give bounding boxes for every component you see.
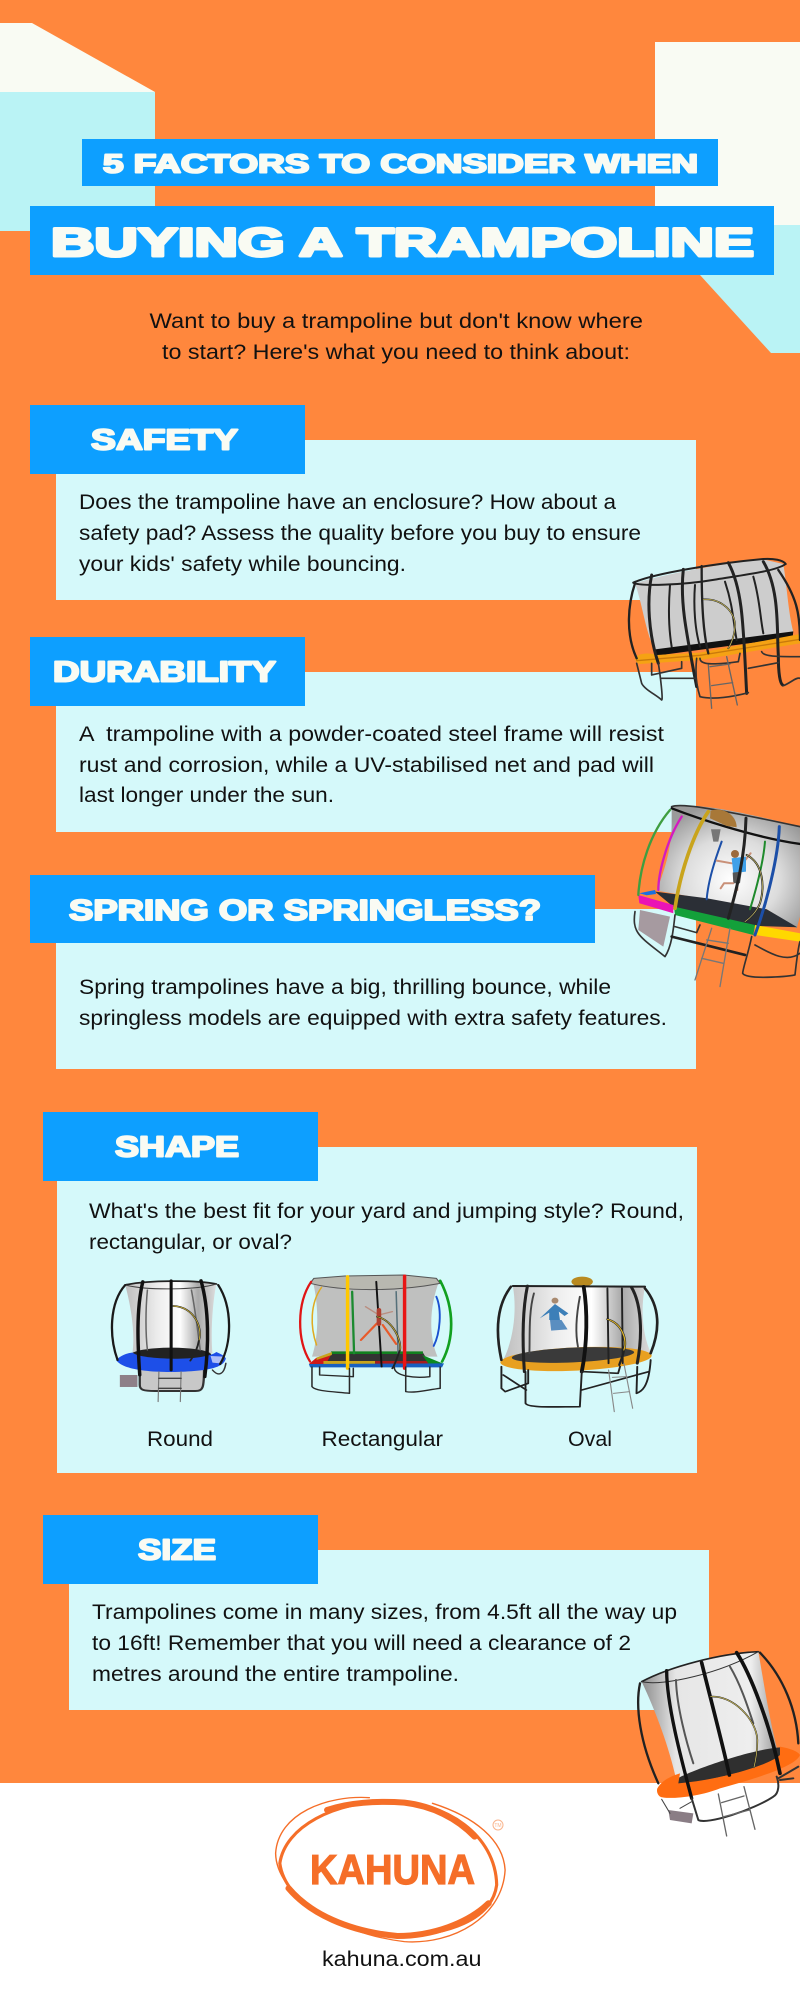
main title banner xyxy=(30,206,774,275)
panel: durability xyxy=(30,637,696,832)
heading: size: SIZE xyxy=(138,1534,216,1566)
subtitle banner: 5 FACTORS TO CONSIDER WHEN xyxy=(103,150,698,178)
text: size: Trampolines come in many sizes, from 4.5ft all the way up xyxy=(92,1601,677,1624)
labels: shape names: Oval xyxy=(568,1428,612,1451)
heading: safety xyxy=(30,405,305,474)
icon: orange round trampoline near size xyxy=(638,1652,800,1836)
heading: spring or springless: SPRING OR SPRINGLESS? xyxy=(69,895,541,927)
text: durability: rust and corrosion, while a UV-stabilised net and pad will xyxy=(79,754,654,777)
text: size: to 16ft! Remember that you will need a clearance of 2 xyxy=(92,1632,631,1655)
text: shape: What's the best fit for your yard and jumping style? Round, xyxy=(89,1200,684,1223)
text: safety: Does the trampoline have an enclosure? How about a xyxy=(79,491,616,514)
icon: rectangular trampoline xyxy=(300,1275,451,1393)
text: safety xyxy=(79,491,641,576)
text: safety: your kids' safety while bouncing. xyxy=(79,553,406,576)
icon: oval trampoline near safety xyxy=(629,559,800,708)
logo: kahuna: KAHUNA xyxy=(310,1846,475,1893)
labels: shape names: Round xyxy=(147,1428,213,1451)
main title banner: BUYING A TRAMPOLINE xyxy=(51,221,754,265)
heading: safety: SAFETY xyxy=(91,424,238,456)
subtitle banner xyxy=(82,139,718,186)
heading: shape: SHAPE xyxy=(115,1132,239,1164)
heading: shape xyxy=(43,1112,318,1181)
text: spring or springless: Spring trampolines have a big, thrilling bounce, while xyxy=(79,976,611,999)
panel: shape xyxy=(43,1112,697,1473)
icon: trademark xyxy=(493,1820,503,1830)
text: shape: rectangular, or oval? xyxy=(89,1231,292,1254)
heading: durability: DURABILITY xyxy=(53,656,276,688)
text: size xyxy=(92,1601,677,1686)
text: durability: A trampoline with a powder-coated steel frame will resist xyxy=(79,723,664,746)
heading: spring or springless xyxy=(30,875,595,943)
icon: rainbow trampoline near spring section xyxy=(634,806,800,987)
panel: safety xyxy=(30,405,696,600)
intro text: Want to buy a trampoline but don't know where xyxy=(150,310,643,333)
panel: spring or springless xyxy=(30,875,696,1069)
decorative corner shapes xyxy=(0,23,800,353)
website url: kahuna.com.au xyxy=(322,1948,482,1971)
text: durability xyxy=(79,723,664,807)
heading: durability xyxy=(30,637,305,706)
labels: shape names xyxy=(147,1428,612,1451)
text: spring or springless: springless models are equipped with extra safety features. xyxy=(79,1007,667,1030)
labels: shape names: Rectangular xyxy=(322,1428,443,1451)
icon: trademark: TM xyxy=(494,1823,502,1829)
logo: kahuna xyxy=(276,1797,505,1942)
heading: size xyxy=(43,1515,318,1584)
icon: round trampoline xyxy=(112,1281,229,1402)
text: size: metres around the entire trampoline. xyxy=(92,1663,459,1686)
text: spring or springless xyxy=(79,976,667,1030)
title block xyxy=(30,139,774,275)
intro text: to start? Here's what you need to think about: xyxy=(162,341,630,364)
intro text xyxy=(150,310,643,364)
text: safety: safety pad? Assess the quality before you buy to ensure xyxy=(79,522,641,545)
white footer background xyxy=(0,1783,800,2000)
text: durability: last longer under the sun. xyxy=(79,784,334,807)
panel: size xyxy=(43,1515,709,1710)
text: shape xyxy=(89,1200,684,1254)
icon: oval trampoline xyxy=(498,1277,657,1412)
